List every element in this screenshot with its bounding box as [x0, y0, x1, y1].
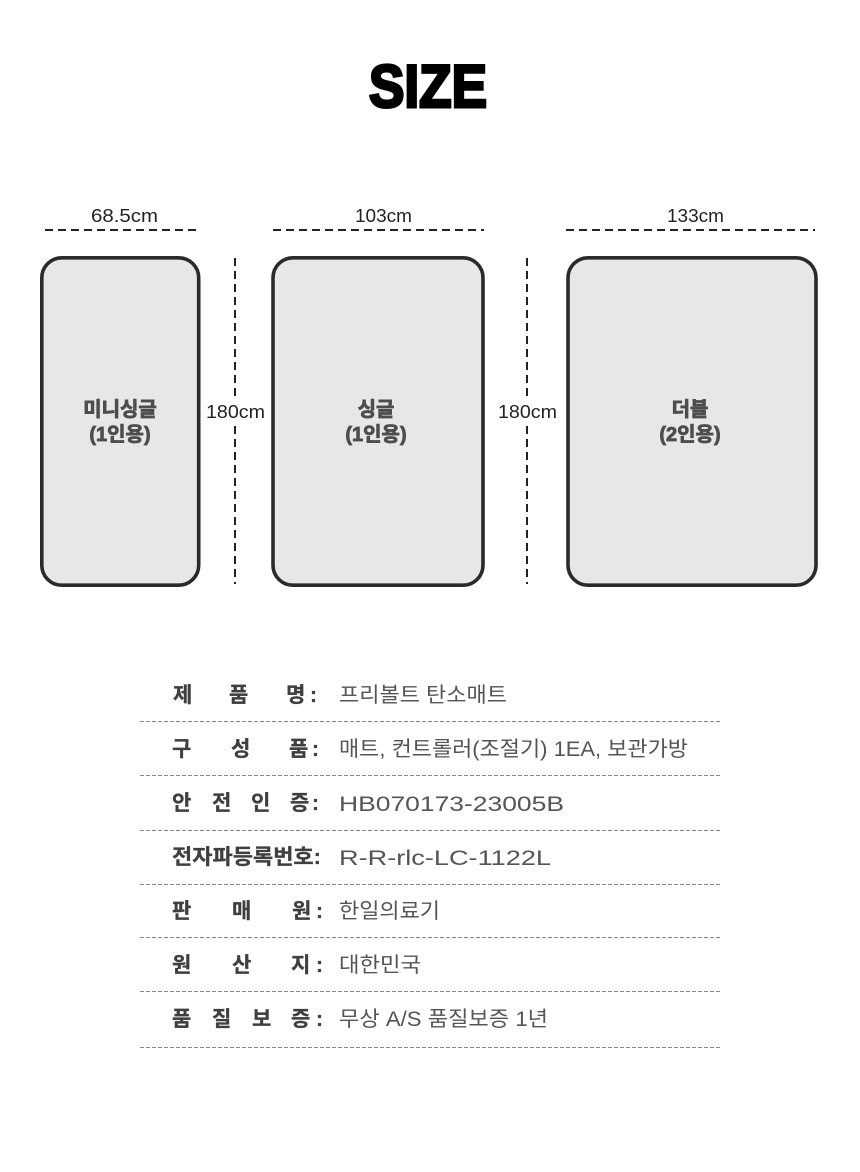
row: safety certification: HB070173-23005B	[339, 793, 564, 816]
row: radio registration number	[140, 846, 720, 884]
width label: 133cm: 133cm	[667, 206, 724, 226]
row: components: 매트, 컨트롤러(조절기) 1EA, 보관가방	[339, 738, 688, 761]
row: product name: 프리볼트 탄소매트	[339, 684, 507, 707]
row: safety certification: 안전인증:	[172, 792, 319, 815]
row: product name: 제품명:	[173, 684, 317, 707]
width label: 103cm: 103cm	[355, 206, 412, 226]
panel: single mat: (1인용)	[345, 423, 407, 446]
panel: product spec table	[140, 684, 720, 1048]
panel: mini single mat	[42, 206, 199, 585]
row: origin: 원산지:	[172, 954, 323, 977]
mat: mini single	[42, 258, 199, 585]
row: warranty: 품질보증:	[172, 1008, 323, 1031]
row: components	[140, 738, 720, 776]
row: safety certification	[140, 792, 720, 830]
row: components: 구성품:	[172, 738, 319, 761]
row: seller: 한일의료기	[339, 900, 440, 923]
width label: 68.5cm: 68.5cm	[91, 206, 158, 226]
row: seller: 판매원:	[172, 900, 323, 923]
row: origin: 대한민국	[339, 954, 421, 977]
height measure: right: 180cm	[498, 402, 557, 422]
height measure: left: 180cm	[206, 402, 265, 422]
title: SIZE	[369, 53, 487, 120]
row: product name	[140, 684, 720, 722]
panel: mini single mat: (1인용)	[89, 423, 151, 446]
mat name: mini single: 미니싱글	[83, 398, 157, 421]
panel: double mat: (2인용)	[659, 423, 721, 446]
row: radio registration number: R-R-rlc-LC-1122L	[339, 847, 551, 870]
panel: double mat	[566, 206, 816, 585]
mat: double	[568, 258, 816, 585]
row: warranty	[140, 1008, 720, 1048]
row: warranty: 무상 A/S 품질보증 1년	[339, 1008, 548, 1031]
mat name: single: 싱글	[358, 398, 394, 421]
mat name: double: 더블	[672, 398, 708, 421]
mat: single	[273, 258, 483, 585]
row: origin	[140, 954, 720, 992]
row: radio registration number: 전자파등록번호:	[172, 846, 321, 869]
row: seller	[140, 900, 720, 938]
panel: single mat	[273, 206, 484, 585]
